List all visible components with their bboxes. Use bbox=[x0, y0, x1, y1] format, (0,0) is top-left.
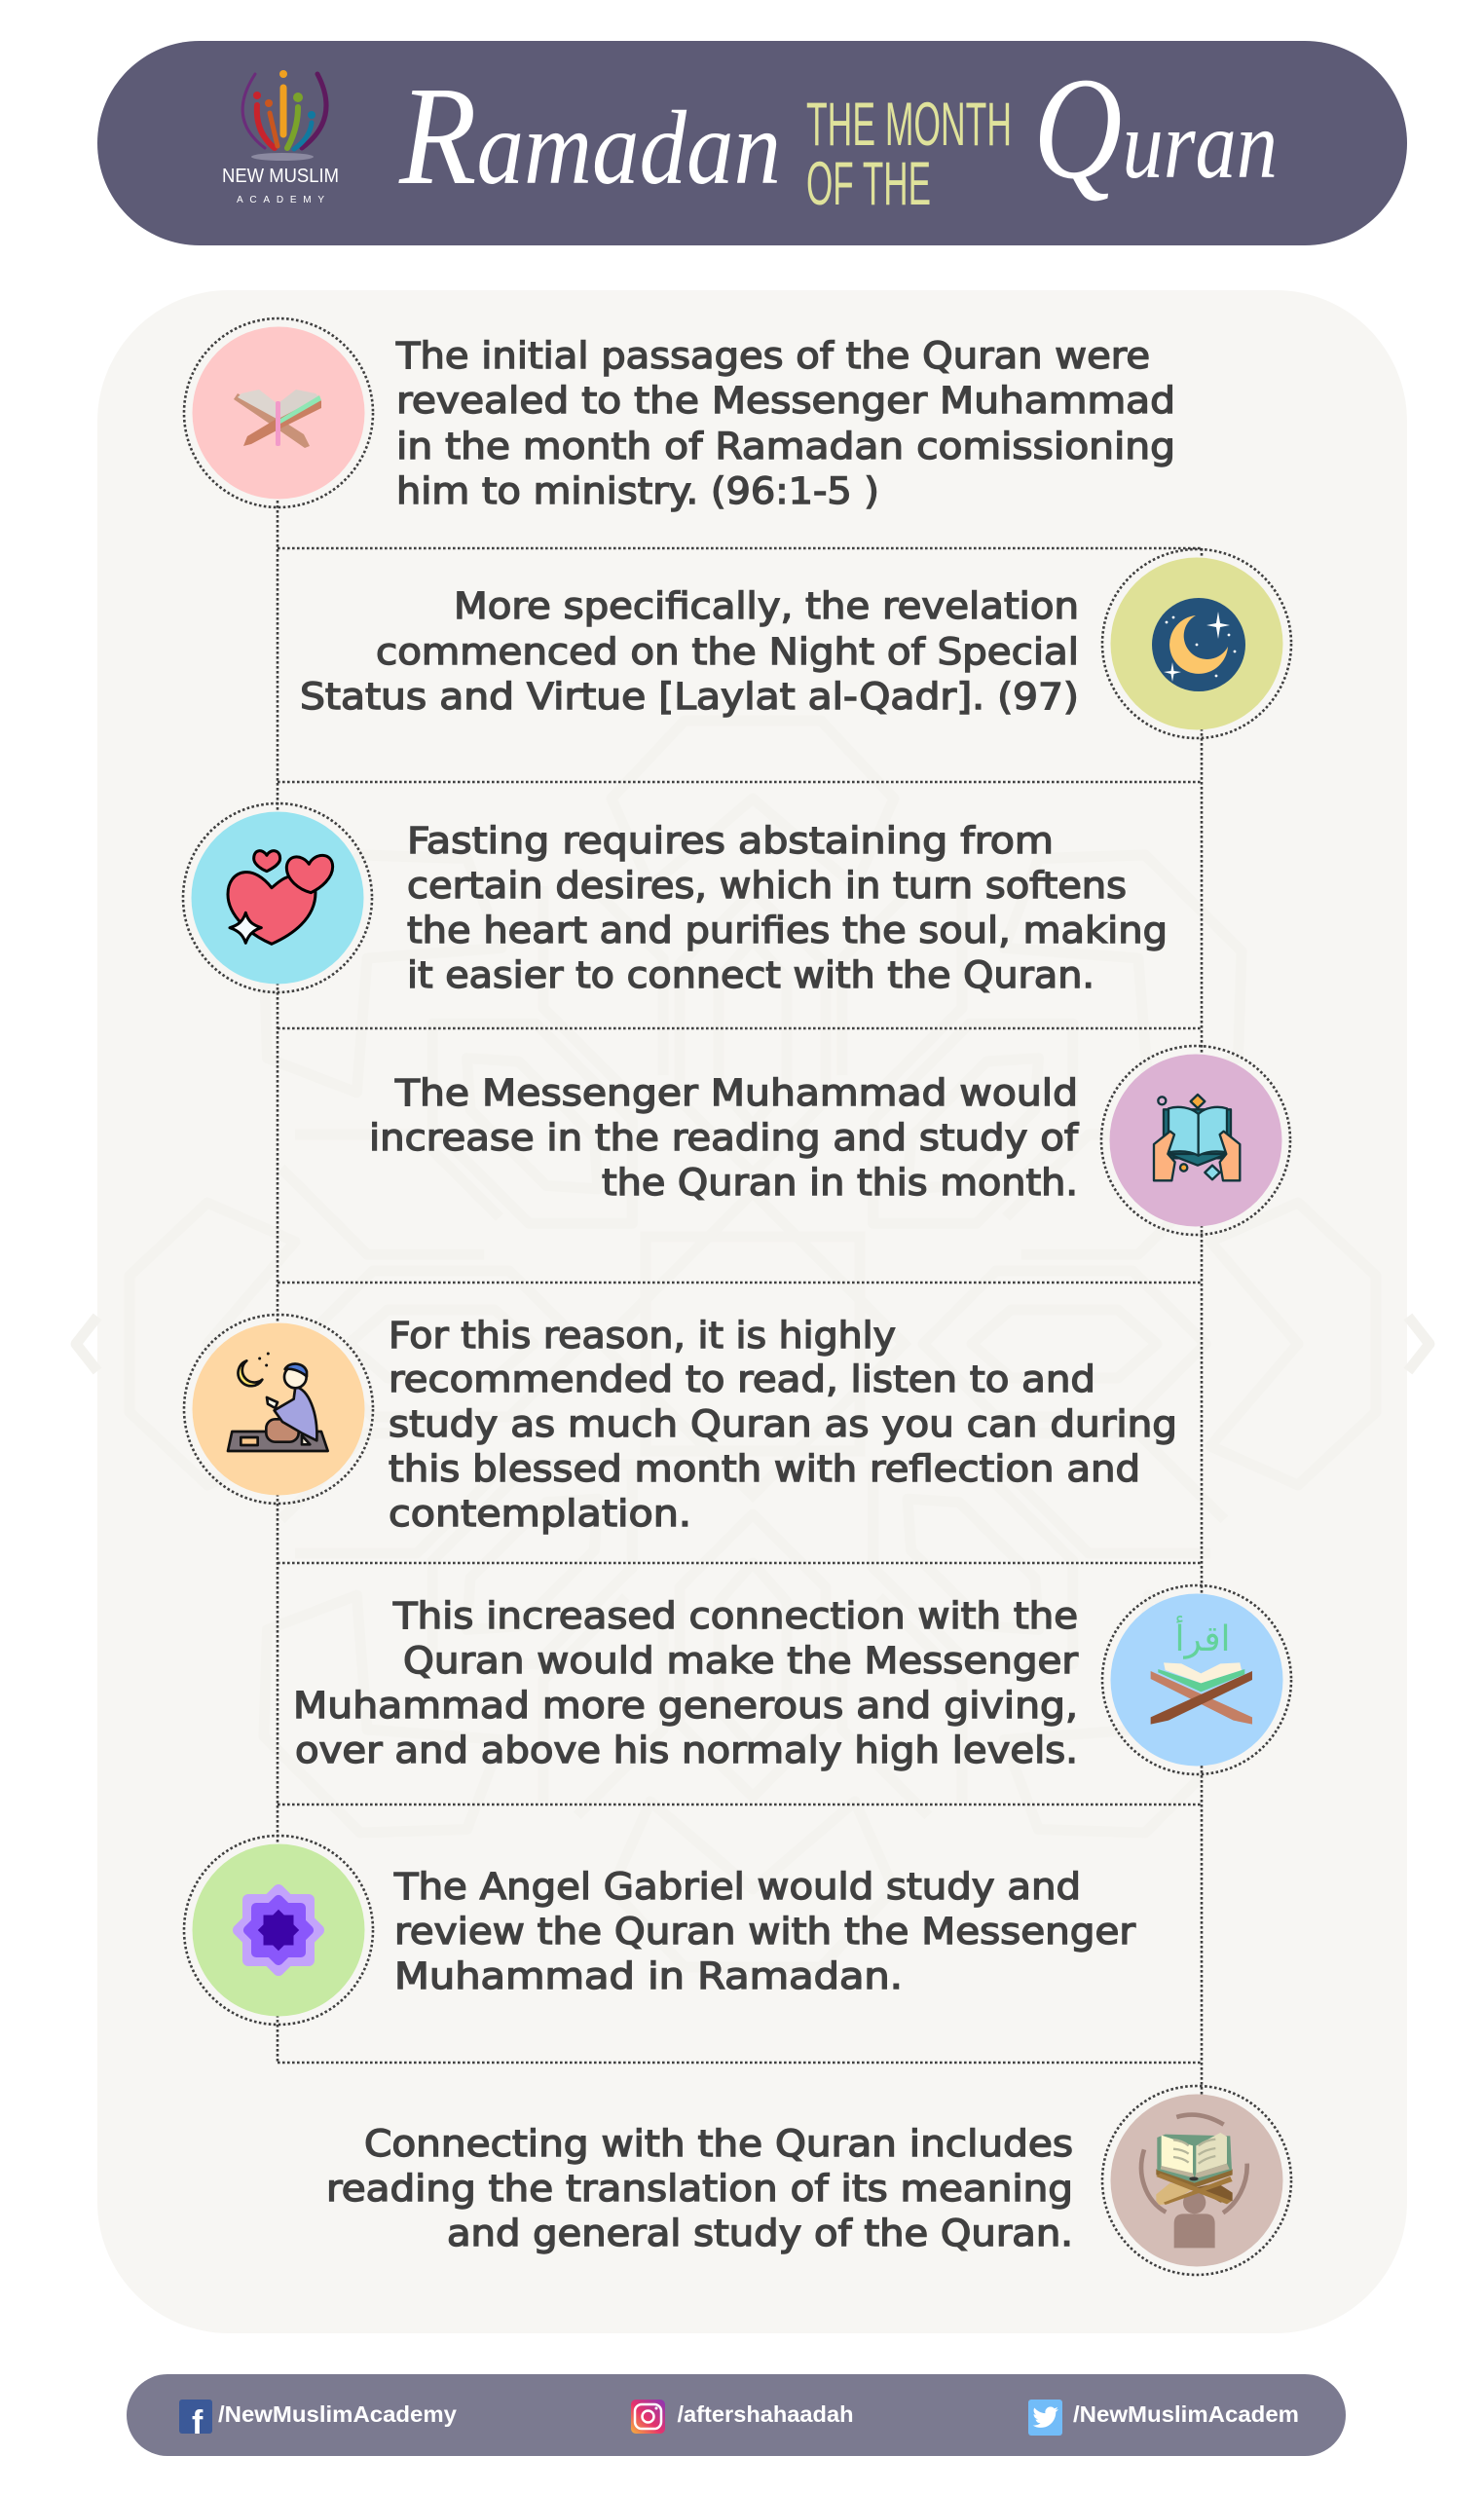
step 5 text: recommended to read, listen to and bbox=[389, 1358, 1095, 1400]
step 4 text bbox=[369, 1072, 1079, 1204]
step 1 icon: open book on stand, pink circle bbox=[184, 318, 373, 507]
left and right chevron ornaments bbox=[76, 1317, 1429, 1371]
step 1 text: The initial passages of the Quran were bbox=[395, 335, 1150, 377]
step 8 text: and general study of the Quran. bbox=[447, 2213, 1073, 2254]
step 7 text: Muhammad in Ramadan. bbox=[394, 1955, 903, 1997]
main panel bbox=[97, 290, 1407, 2333]
header banner bbox=[97, 41, 1407, 245]
step 4 text: the Quran in this month. bbox=[602, 1162, 1078, 1204]
logo: New Muslim Academy: ACADEMY bbox=[237, 195, 324, 205]
step 8 text bbox=[326, 2123, 1073, 2254]
step 3 text: it easier to connect with the Quran. bbox=[407, 954, 1094, 996]
subtitle: the month of the bbox=[806, 91, 1012, 218]
step 6 icon: Quran on stand with Arabic word, blue circle: اقرأ bbox=[1174, 1616, 1231, 1659]
step 1 text bbox=[395, 335, 1175, 512]
step 8 text: reading the translation of its meaning bbox=[326, 2168, 1073, 2210]
step 1 text: him to ministry. (96:1-5 ) bbox=[396, 470, 879, 512]
subtitle: the month of the: OF THE bbox=[806, 150, 931, 218]
step 4 text: The Messenger Muhammad would bbox=[394, 1072, 1078, 1114]
step 4 text: increase in the reading and study of bbox=[369, 1117, 1079, 1159]
step 7 text: The Angel Gabriel would study and bbox=[393, 1866, 1081, 1908]
step 2 text bbox=[300, 585, 1079, 718]
step 2 icon: crescent moon, olive circle bbox=[1102, 549, 1291, 738]
step 7 text: review the Quran with the Messenger bbox=[394, 1911, 1136, 1953]
step 3 text: Fasting requires abstaining from bbox=[407, 820, 1054, 862]
step 6 text: Muhammad more generous and giving, bbox=[293, 1685, 1078, 1727]
background arabesque pattern bbox=[130, 721, 1376, 1967]
twitter handle: /NewMuslimAcadem bbox=[1073, 2401, 1299, 2427]
title: Quran: Quran bbox=[1033, 48, 1278, 209]
step 6 text bbox=[293, 1595, 1079, 1771]
step 3 text: the heart and purifies the soul, making bbox=[407, 910, 1168, 951]
step 5 text: study as much Quran as you can during bbox=[389, 1403, 1177, 1445]
step 2 text: More specifically, the revelation bbox=[454, 585, 1079, 627]
step 5 icon: person praying on rug, peach circle bbox=[184, 1315, 373, 1504]
step 8 text: Connecting with the Quran includes bbox=[364, 2123, 1073, 2165]
step 6 text: over and above his normaly high levels. bbox=[295, 1730, 1078, 1771]
step 5 text bbox=[389, 1315, 1177, 1535]
logo: New Muslim Academy bbox=[222, 70, 339, 205]
step 1 text: revealed to the Messenger Muhammad bbox=[396, 380, 1175, 422]
step 7 text bbox=[393, 1866, 1136, 1997]
step 5 text: contemplation. bbox=[389, 1493, 691, 1535]
instagram handle: /aftershahaadah bbox=[678, 2401, 853, 2427]
icon: facebook: f bbox=[192, 2404, 204, 2441]
subtitle: the month of the: THE MONTH bbox=[806, 91, 1012, 159]
step 3 text bbox=[407, 820, 1168, 996]
step 2 text: commenced on the Night of Special bbox=[376, 631, 1079, 673]
step 3 icon: hearts, blue circle bbox=[183, 803, 372, 992]
icon: facebook bbox=[179, 2400, 212, 2441]
step 5 text: For this reason, it is highly bbox=[389, 1315, 896, 1357]
step 6 icon: Quran on stand with Arabic word, blue circle bbox=[1102, 1585, 1291, 1774]
footer bar bbox=[127, 2374, 1346, 2456]
icon: instagram bbox=[631, 2400, 665, 2434]
facebook handle: /NewMuslimAcademy bbox=[218, 2401, 457, 2427]
title: Ramadan: Ramadan bbox=[398, 58, 781, 214]
step 6 text: This increased connection with the bbox=[392, 1595, 1078, 1637]
step 4 icon: hands holding book, mauve circle bbox=[1101, 1046, 1290, 1235]
step 1 text: in the month of Ramadan comissioning bbox=[396, 426, 1175, 467]
step 8 icon: person reading Quran, brown circle bbox=[1102, 2086, 1291, 2275]
step 3 text: certain desires, which in turn softens bbox=[407, 865, 1127, 907]
step 6 text: Quran would make the Messenger bbox=[403, 1640, 1079, 1682]
dotted timeline connector bbox=[278, 413, 1202, 2180]
step 7 icon: eight-point star, green circle bbox=[184, 1836, 373, 2025]
step 5 text: this blessed month with reflection and bbox=[389, 1448, 1140, 1490]
step 2 text: Status and Virtue [Laylat al-Qadr]. (97) bbox=[300, 676, 1079, 718]
logo: New Muslim Academy: NEW MUSLIM bbox=[222, 166, 339, 187]
icon: twitter bbox=[1028, 2400, 1062, 2436]
